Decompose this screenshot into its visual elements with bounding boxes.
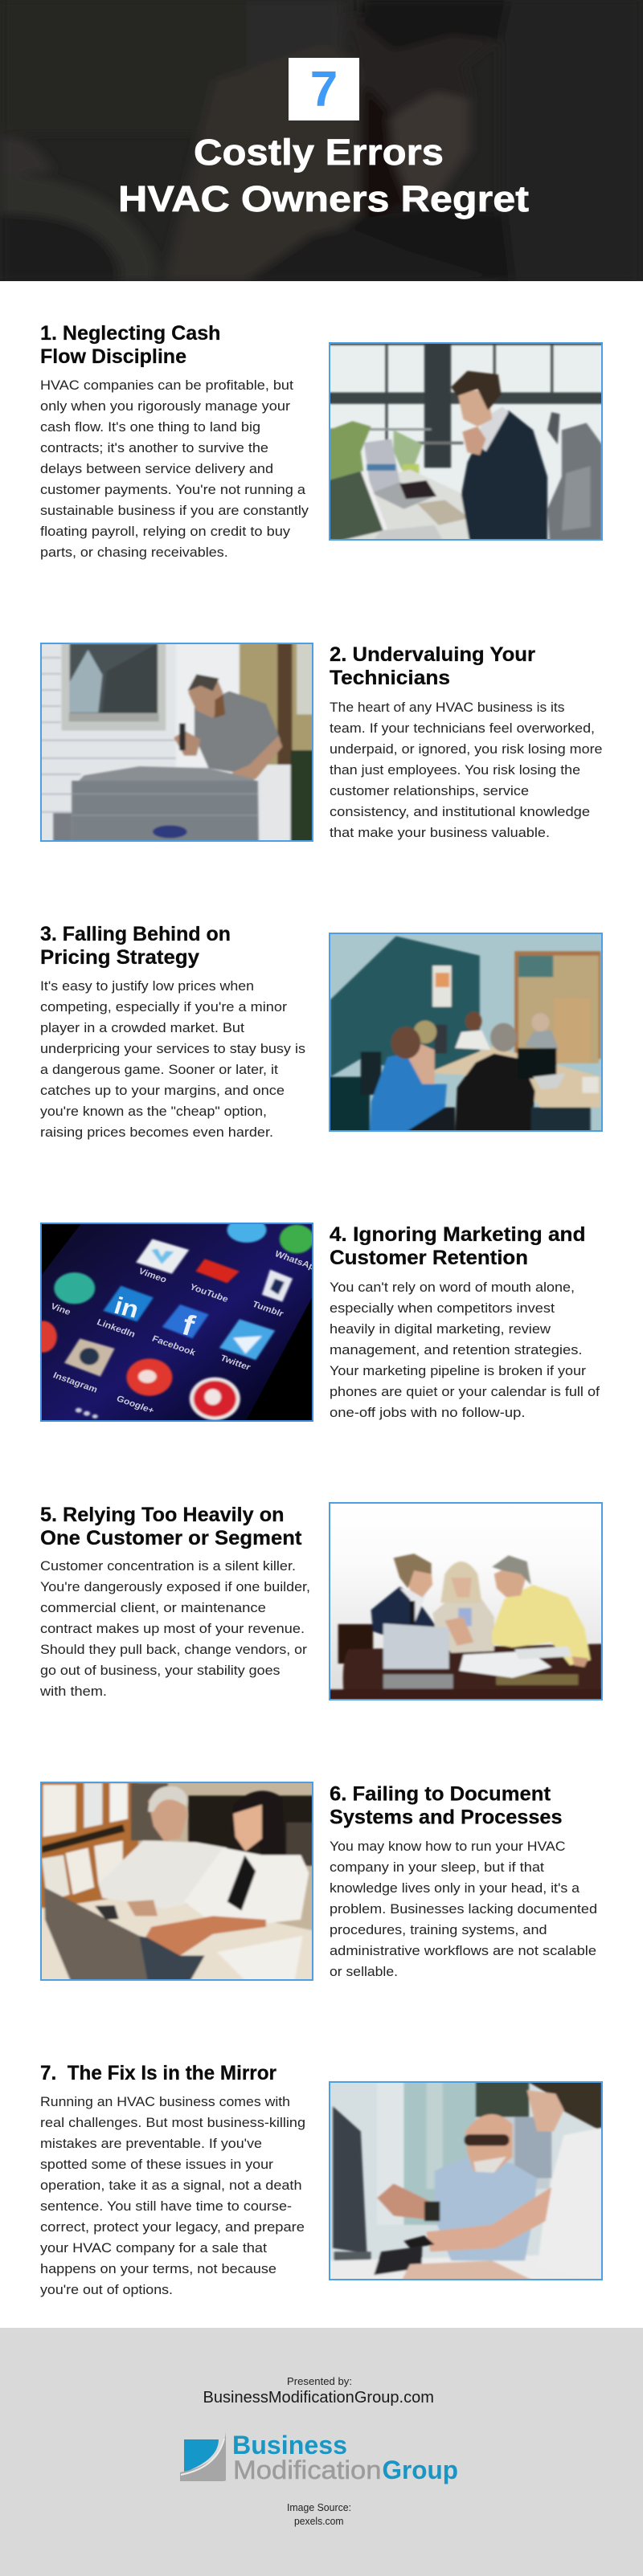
body text: you're out of options. [40, 2282, 173, 2297]
panel: error 7 [40, 2062, 603, 2297]
heading: 5. Relying Too Heavily on [40, 1504, 285, 1526]
panel: error 3 [40, 923, 603, 1140]
body text: You're dangerously exposed if one builder, [40, 1579, 310, 1594]
body text: with them. [39, 1684, 107, 1699]
panel: error 2 [40, 643, 603, 842]
body text: only when you rigorously manage your [40, 398, 290, 414]
body text: procedures, training systems, and [330, 1922, 547, 1937]
body text [330, 1280, 600, 1420]
body text: competing, especially if you're a minor [40, 999, 287, 1014]
body text: cash flow. It's one thing to land big [40, 419, 260, 435]
app icon labels: Tumblr [251, 1300, 285, 1319]
body text: correct, protect your legacy, and prepare [40, 2219, 305, 2235]
heading: One Customer or Segment [40, 1527, 302, 1549]
logo wordmark: Modification [233, 2456, 381, 2484]
body text: You can't rely on word of mouth alone, [330, 1280, 575, 1295]
app icon labels: WhatsApp [273, 1250, 322, 1274]
body text: contracts; it's another to survive the [40, 440, 268, 455]
body text: operation, take it as a signal, not a death [40, 2178, 302, 2193]
logo wordmark: Group [383, 2456, 458, 2484]
body text: catches up to your margins, and once [40, 1083, 285, 1098]
body text: you're known as the "cheap" option, [40, 1104, 267, 1119]
title: Costly Errors [194, 132, 444, 173]
presented by: Presented by: [287, 2375, 352, 2387]
app icon labels: f [178, 1308, 199, 1342]
body text: floating payroll, relying on credit to buy [40, 524, 291, 539]
heading: 3. Falling Behind on [40, 923, 231, 945]
body text [39, 1558, 310, 1699]
body text: sentence. You still have time to course- [40, 2198, 292, 2214]
background photo: man with hands on face [0, 0, 643, 281]
body text: customer payments. You're not running a [40, 482, 306, 497]
body text: player in a crowded market. But [40, 1020, 244, 1035]
body text: real challenges. But most business-killing [40, 2115, 305, 2130]
body text: parts, or chasing receivables. [40, 545, 228, 560]
number box: 7 [310, 62, 338, 117]
body text: underpaid, or ignored, you risk losing more [330, 741, 603, 757]
title [118, 132, 529, 219]
photo: social media app icons [29, 1218, 322, 1422]
body text: Customer concentration is a silent killer. [40, 1558, 296, 1574]
photo: technician inspecting AC unit [40, 643, 313, 842]
icon: logo page curl [180, 2431, 226, 2481]
body text [40, 378, 309, 560]
body text: a dangerous game. Sooner or later, it [40, 1062, 278, 1077]
photo: businessman at laptops [329, 342, 603, 541]
app icon labels: Instagram [51, 1371, 99, 1394]
body text: go out of business, your stability goes [40, 1663, 280, 1678]
image source: Image Source: [287, 2501, 351, 2513]
body text: knowledge lives only in your head, it's a [330, 1880, 580, 1896]
body text [330, 700, 603, 840]
heading: Flow Discipline [40, 345, 186, 368]
app icon labels [49, 1250, 322, 1416]
body text [40, 2094, 305, 2297]
heading [40, 322, 220, 368]
body text: mistakes are preventable. If you've [40, 2136, 262, 2151]
heading [330, 1223, 585, 1269]
logo wordmark [232, 2431, 458, 2484]
heading: 2. Undervaluing Your [330, 643, 535, 666]
body text: contract makes up most of your revenue. [40, 1621, 305, 1636]
body text: your HVAC company for a sale that [40, 2240, 267, 2256]
body text: or sellable. [330, 1964, 398, 1979]
website: BusinessModificationGroup.com [203, 2389, 434, 2407]
app icon labels: Vine [49, 1302, 72, 1317]
body text: commercial client, or maintenance [40, 1600, 266, 1615]
heading: 1. Neglecting Cash [40, 322, 220, 345]
app icon labels: in [111, 1292, 142, 1323]
body text: sustainable business if you are constantly [40, 503, 309, 518]
app icon labels: Facebook [150, 1334, 197, 1358]
panel: error 5 [39, 1502, 603, 1700]
heading: Customer Retention [330, 1247, 528, 1269]
body text: HVAC companies can be profitable, but [40, 378, 293, 393]
image source [287, 2501, 351, 2527]
app icon labels: Google+ [115, 1394, 156, 1416]
app icon labels: YouTube [188, 1283, 230, 1304]
header banner [0, 0, 643, 281]
title: HVAC Owners Regret [118, 178, 529, 219]
heading [40, 1504, 302, 1549]
body text: company in your sleep, but if that [330, 1860, 544, 1875]
body text: spotted some of these issues in your [40, 2157, 273, 2172]
logo [180, 2431, 458, 2484]
body text: delays between service delivery and [40, 461, 273, 476]
body text: one-off jobs with no follow-up. [330, 1405, 526, 1420]
body text: Running an HVAC business comes with [40, 2094, 290, 2109]
app icon labels: Vimeo [137, 1267, 168, 1285]
heading [330, 1783, 563, 1828]
footer [0, 2328, 643, 2576]
panel: error 1 [40, 322, 603, 560]
photo: team meeting room [329, 933, 603, 1132]
body text: happens on your terms, not because [40, 2261, 276, 2276]
body text: team. If your technicians feel overworked, [330, 721, 595, 736]
body text: The heart of any HVAC business is its [330, 700, 564, 715]
app icon labels: Twitter [219, 1353, 252, 1373]
body text: customer relationships, service [330, 783, 529, 798]
photo: two colleagues at a laptop [40, 1782, 313, 1981]
body text: management, and retention strategies. [330, 1342, 582, 1357]
panel: error 4 [29, 1218, 600, 1422]
body text: Your marketing pipeline is broken if your [330, 1363, 586, 1378]
body text: You may know how to run your HVAC [330, 1839, 566, 1854]
body text: heavily in digital marketing, review [330, 1321, 551, 1337]
panel: error 6 [40, 1782, 597, 1981]
image source: pexels.com [294, 2515, 344, 2527]
heading: Pricing Strategy [40, 946, 199, 969]
body text: Should they pull back, change vendors, or [40, 1642, 307, 1657]
body text: raising prices becomes even harder. [40, 1125, 273, 1140]
body text: problem. Businesses lacking documented [330, 1901, 597, 1917]
body text: than just employees. You risk losing the [330, 762, 580, 778]
body text [330, 1839, 597, 1979]
photo: man and woman at a computer [329, 2081, 603, 2280]
body text: administrative workflows are not scalable [330, 1943, 596, 1958]
heading [330, 643, 535, 689]
heading: Systems and Processes [330, 1806, 563, 1828]
heading [40, 923, 231, 969]
heading: 6. Failing to Document [330, 1783, 551, 1806]
number box [289, 58, 359, 120]
photo: three people at a table [329, 1502, 603, 1700]
body text: especially when competitors invest [330, 1300, 555, 1316]
body text: phones are quiet or your calendar is full of [330, 1384, 600, 1399]
body text: that make your business valuable. [330, 825, 550, 840]
body text: underpricing your services to stay busy is [40, 1041, 305, 1056]
logo wordmark: Business [232, 2431, 347, 2460]
heading: 7. The Fix Is in the Mirror [40, 2062, 276, 2084]
body text: It's easy to justify low prices when [40, 978, 254, 994]
body text: consistency, and institutional knowledge [330, 804, 590, 819]
heading: Technicians [330, 667, 450, 689]
heading: 4. Ignoring Marketing and [330, 1223, 585, 1246]
body text [40, 978, 305, 1140]
app icon labels: LinkedIn [96, 1318, 137, 1340]
